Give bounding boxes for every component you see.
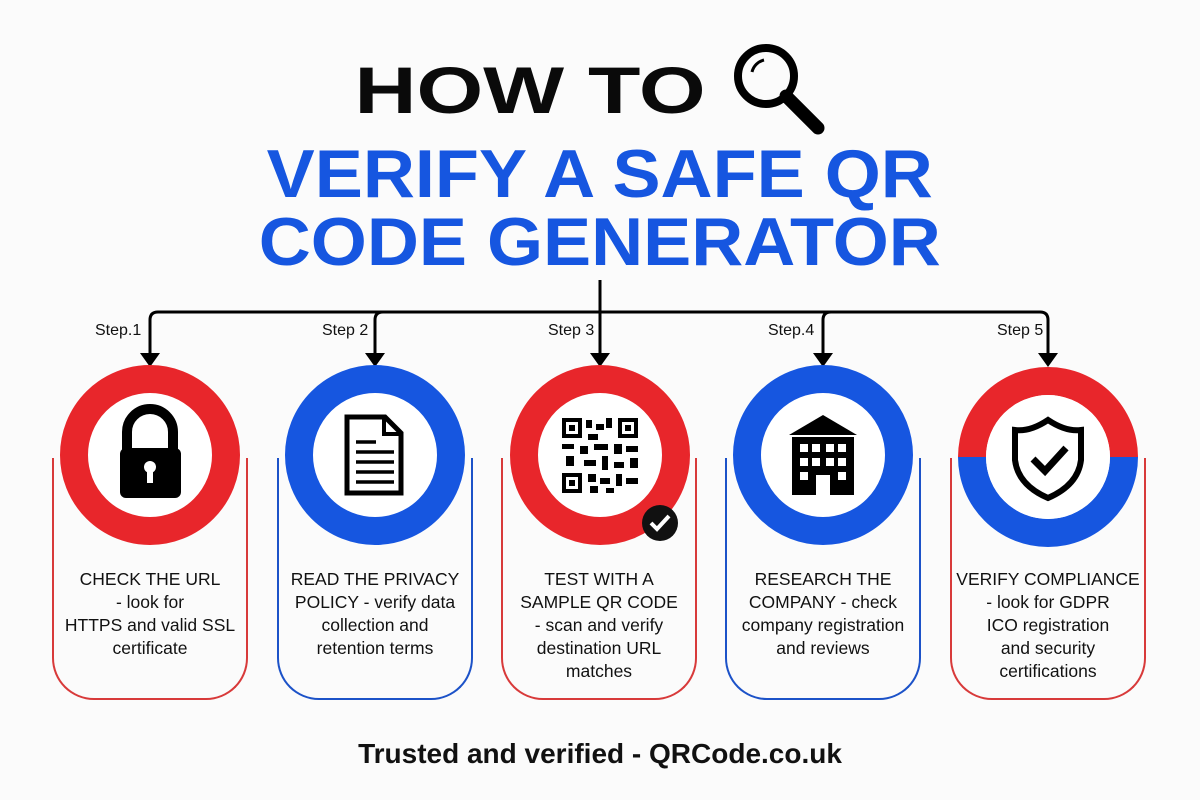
card 2: READ THE PRIVACY bbox=[291, 569, 459, 589]
heading blue: VERIFY A SAFE QR bbox=[267, 136, 933, 212]
card 1 bbox=[52, 458, 248, 700]
icon: qr code with check bbox=[524, 379, 678, 541]
text: Step 2 bbox=[322, 322, 368, 339]
text: Step 5 bbox=[997, 322, 1043, 339]
circles with icons bbox=[60, 365, 1138, 547]
icon: shield bbox=[958, 367, 1138, 547]
heading blue: CODE GENERATOR bbox=[259, 204, 941, 280]
icon: document bbox=[299, 379, 451, 531]
card 5: VERIFY COMPLIANCE bbox=[956, 569, 1140, 589]
card 4 bbox=[725, 458, 921, 700]
card 4: COMPANY - check bbox=[749, 592, 897, 612]
card 3: destination URL bbox=[537, 638, 661, 658]
card 3: - scan and verify bbox=[535, 615, 663, 635]
heading line 1: HOW TO bbox=[354, 53, 706, 127]
card 3: TEST WITH A bbox=[544, 569, 654, 589]
card 2: collection and bbox=[321, 615, 429, 635]
footer: Trusted and verified - QRCode.co.uk bbox=[358, 738, 842, 769]
card 5: ICO registration bbox=[987, 615, 1109, 635]
card 5: and security bbox=[1001, 638, 1095, 658]
card 4: RESEARCH THE bbox=[755, 569, 891, 589]
connector tree bbox=[140, 280, 1058, 367]
card 3 bbox=[501, 458, 697, 700]
icon: building bbox=[747, 379, 899, 531]
text: Step 3 bbox=[548, 322, 594, 339]
step labels: Step.1 bbox=[95, 322, 141, 339]
icon: lock bbox=[74, 379, 226, 531]
card 1: certificate bbox=[113, 638, 187, 658]
icon: magnifier bbox=[734, 44, 824, 134]
card 1: CHECK THE URL bbox=[80, 569, 220, 589]
card 3: SAMPLE QR CODE bbox=[520, 592, 678, 612]
card 5 bbox=[950, 458, 1146, 700]
title bbox=[259, 44, 941, 280]
card 1: - look for bbox=[116, 592, 184, 612]
card 5: certifications bbox=[999, 661, 1097, 681]
card 2: retention terms bbox=[317, 638, 433, 658]
card 4: and reviews bbox=[776, 638, 870, 658]
card 2 bbox=[277, 458, 473, 700]
heading blue bbox=[259, 136, 941, 280]
card 1: HTTPS and valid SSL bbox=[65, 615, 235, 635]
text: Step.4 bbox=[768, 322, 814, 339]
card 2: POLICY - verify data bbox=[295, 592, 455, 612]
card 3: matches bbox=[566, 661, 632, 681]
card 4: company registration bbox=[742, 615, 904, 635]
card 5: - look for GDPR bbox=[986, 592, 1110, 612]
